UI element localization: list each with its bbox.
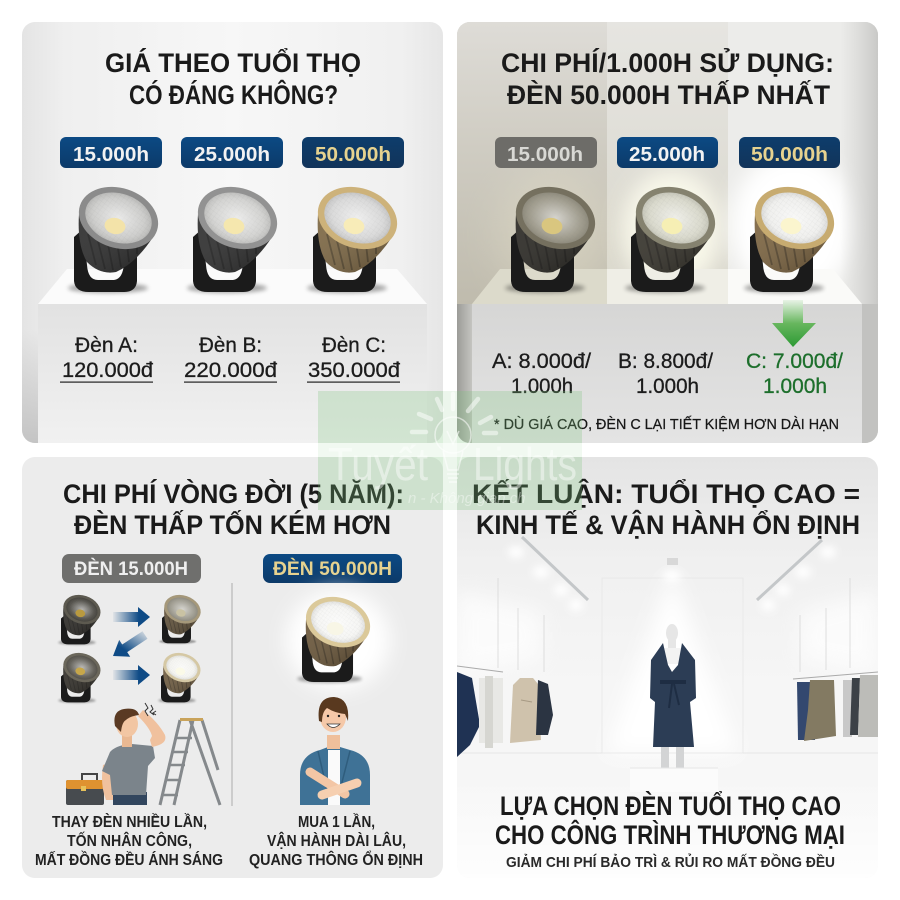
heading: lifecycle cost: ĐÈN THẤP TỐN KÉM HƠN	[74, 508, 391, 540]
price: lamp C: 350.000đ	[308, 359, 400, 382]
price: lamp B: 220.000đ	[184, 359, 277, 382]
rack: beige coats	[510, 678, 553, 743]
arrow: cost down	[772, 300, 816, 347]
price: lamp A: Đèn A:	[75, 334, 138, 357]
badge: 15.000H lamp	[62, 554, 201, 583]
cost: lamp C: 1.000h	[763, 375, 827, 398]
heading: price by lifespan	[106, 48, 360, 104]
watermark: Tuyết Lights: Lights	[473, 438, 577, 490]
lamp C	[306, 186, 398, 296]
heading: lifecycle cost: CHI PHÍ VÒNG ĐỜI (5 NĂM):	[63, 478, 404, 509]
caption: frequent replacement	[35, 812, 223, 869]
podium	[630, 768, 718, 792]
lamp A	[66, 186, 158, 296]
badge: 50.000h: 50.000h	[751, 144, 828, 166]
badge: 15.000h: 15.000h	[73, 144, 149, 166]
heading: conclusion: KINH TẾ & VẬN HÀNH ỔN ĐỊNH	[476, 509, 860, 540]
heading: cost per 1000 hours	[502, 48, 832, 104]
badge: 25.000h: 25.000h	[629, 144, 705, 166]
display plinth	[472, 269, 862, 443]
icon: stressed worker	[102, 703, 165, 805]
badge: 15.000h dim	[495, 137, 597, 168]
badge: 25.000h	[181, 137, 283, 168]
icon: happy customer	[300, 697, 370, 805]
badge: 15.000h dim: 15.000h	[507, 144, 583, 166]
panel: conclusion	[457, 457, 878, 878]
badge: 50.000H lamp: ĐÈN 50.000H	[273, 558, 392, 580]
heading: price by lifespan: CÓ ĐÁNG KHÔNG?	[129, 79, 338, 110]
badge: 50.000h	[302, 137, 404, 168]
price: lamp B: Đèn B:	[199, 334, 262, 357]
footnote: * DÙ GIÁ CAO, ĐÈN C LẠI TIẾT KIỆM HƠN DÀI HẠN	[494, 416, 839, 433]
display plinth	[38, 269, 427, 443]
closing message	[495, 790, 845, 871]
price: lamp B	[184, 334, 277, 383]
badge: 50.000h	[739, 137, 840, 168]
badge: 15.000H lamp: ĐÈN 15.000H	[74, 558, 188, 580]
lit column backgrounds	[457, 22, 878, 304]
cost: lamp B: 1.000h	[636, 375, 699, 398]
lamp B	[186, 186, 278, 296]
repeated replacement lamps	[58, 590, 204, 703]
price: lamp A	[60, 334, 153, 383]
caption: frequent replacement: TỐN NHÂN CÔNG,	[67, 830, 192, 850]
cost: lamp A: 1.000h	[511, 375, 573, 398]
rack: left clothes	[457, 666, 503, 757]
watermark: Tuyết Lights	[318, 391, 582, 510]
heading: cost per 1000 hours: CHI PHÍ/1.000H SỬ DỤNG:	[501, 46, 834, 78]
illustration: retail store interior	[457, 537, 878, 878]
caption: buy once: MUA 1 LẦN,	[298, 812, 375, 831]
cost: lamp A	[492, 352, 592, 394]
cost: lamp C: C: 7.000đ/	[746, 350, 843, 373]
arrow: replace 1	[113, 607, 150, 627]
heading: cost per 1000 hours: ĐÈN 50.000H THẤP NHẤT	[507, 79, 830, 110]
heading: conclusion: KẾT LUẬN: TUỔI THỌ CAO =	[472, 478, 860, 509]
icon: ladder	[160, 718, 220, 805]
cost: lamp B: B: 8.800đ/	[618, 350, 713, 373]
lamp A dim	[504, 186, 596, 296]
closing message: GIẢM CHI PHÍ BẢO TRÌ & RỦI RO MẤT ĐỒNG ĐỀU	[506, 853, 835, 871]
watermark: Tuyết Lights: n - Không gian ch	[408, 490, 526, 507]
panel: cost per 1000 hours	[457, 22, 878, 443]
rack: right garments	[793, 672, 878, 741]
cost: lamp B	[620, 352, 714, 394]
badge: 15.000h	[60, 137, 162, 168]
caption: frequent replacement: THAY ĐÈN NHIỀU LẦN,	[52, 812, 207, 831]
heading: lifecycle cost	[64, 479, 402, 534]
cost: lamp C	[746, 352, 844, 394]
big long-life lamp	[286, 589, 390, 690]
arrow: replace 3	[113, 665, 150, 685]
caption: buy once	[249, 812, 423, 869]
watermark: Tuyết Lights: Tuyết	[328, 438, 428, 490]
caption: buy once: VẬN HÀNH DÀI LÂU,	[267, 831, 406, 850]
badge: 25.000h: 25.000h	[194, 144, 270, 166]
badge: 25.000h	[617, 137, 718, 168]
heading: conclusion	[472, 478, 860, 540]
mannequin in navy coat	[650, 624, 696, 776]
panel: five year lifecycle cost	[22, 457, 443, 878]
caption: buy once: QUANG THÔNG ỔN ĐỊNH	[249, 850, 423, 869]
cost: lamp A: A: 8.000đ/	[492, 350, 591, 373]
badge: 50.000H lamp	[263, 554, 402, 583]
heading: price by lifespan: GIÁ THEO TUỔI THỌ	[105, 47, 361, 78]
price: lamp C	[307, 334, 400, 383]
panel: price by lifespan	[22, 22, 443, 443]
price: lamp C: Đèn C:	[322, 334, 386, 357]
badge: 50.000h: 50.000h	[315, 144, 391, 166]
arrow: replace 2	[113, 631, 148, 657]
price: lamp A: 120.000đ	[62, 359, 153, 382]
icon: toolbox	[66, 774, 104, 805]
lamp B	[624, 186, 716, 296]
lamp C bright	[742, 186, 834, 296]
caption: frequent replacement: MẤT ĐỒNG ĐỀU ÁNH SÁNG	[35, 850, 223, 869]
